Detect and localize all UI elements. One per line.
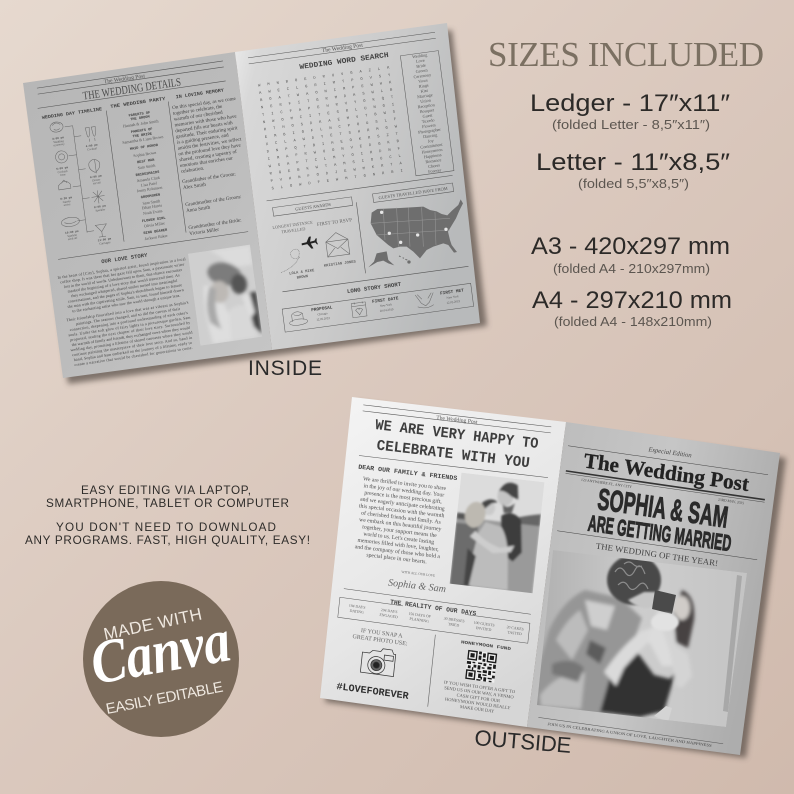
text block: love story: marked the beginning of a love story that would transcend time. As [67, 272, 180, 294]
word list box: Romance [425, 157, 442, 164]
column: in loving memory: celebration. [180, 166, 205, 175]
column: wedding day timeline: Dinner [92, 177, 101, 182]
masthead label: The Wedding Post [436, 415, 478, 426]
text block: love story: the man with the captivating smile. Sam, in turn, found himself drawn [67, 287, 184, 310]
text block: invitation: and we eagerly anticipate celebrating [360, 497, 445, 512]
word list box: Wedding [412, 52, 428, 59]
text block: love story: continue painting the masterpiece of their love story. And so, hand in [72, 335, 193, 358]
panel: long story short timeline: Chicago [317, 311, 328, 316]
column: the wedding party: MAID OF HONOR [130, 144, 159, 152]
icon: heart trail [278, 249, 302, 273]
panel: long story short timeline: PROPOSAL [311, 304, 333, 313]
text block: sizes list: (folded Letter - 8,5″x11″) [552, 118, 710, 132]
badge: made with canva: MADE WITH [102, 605, 204, 644]
text block: sizes list: (folded A4 - 148x210mm) [554, 315, 712, 329]
column: in loving memory: Grandmother of the Groom: [185, 193, 242, 208]
map: USA guests [368, 199, 463, 267]
word list box [400, 51, 454, 176]
column: in loving memory: IN LOVING MEMORY [175, 87, 224, 100]
column: wedding day timeline: 11:00 pm [98, 237, 112, 242]
word list box: Happiness [424, 152, 442, 159]
text block: invitation: world to us. Let's create lasting [363, 531, 435, 546]
column: wedding day timeline [42, 106, 120, 251]
word search grid: NERFITGRMDHSWLB [261, 88, 400, 111]
word list box: Ceremony [413, 72, 432, 79]
subheading: THE WEDDING OF THE YEAR! [595, 541, 719, 568]
column: in loving memory: Grandmother of the Bride: [188, 216, 242, 231]
panel: guests awards: BROWN [297, 275, 309, 281]
badge: made with canva: Canva [86, 607, 235, 698]
column: the wedding party: FLOWER GIRL [142, 217, 166, 224]
column: in loving memory: is a guiding presence, and [177, 132, 229, 146]
heading: sizes included: SIZES INCLUDED [488, 35, 764, 74]
column: wedding day timeline: arrive [63, 202, 71, 207]
column: wedding day timeline: 6:00 pm [90, 175, 102, 179]
column: the wedding party: Noah Evans [143, 208, 163, 216]
word list box: Union [420, 97, 432, 104]
text block: sizes list: A3 - 420x297 mm [531, 233, 730, 260]
text block: sizes list [530, 90, 732, 329]
column: in loving memory: warmth of our cherished [173, 109, 224, 123]
column: the wedding party: Lisa Patel [141, 180, 158, 188]
text block: love story: conversations, and the pages of Sophia's sketchbook began to feature [68, 282, 183, 305]
text block: invitation: this special occasion with the warmth [359, 503, 445, 519]
word list box: Photographer [418, 127, 442, 135]
text block: easy editing: EASY EDITING VIA LAPTOP, [81, 484, 251, 497]
word list box: Kiss [420, 88, 429, 94]
text block: sizes list: Letter - 11″x8,5″ [536, 149, 731, 176]
column: in loving memory: together to celebrate, the [173, 104, 223, 117]
address and date [581, 478, 744, 506]
panel: guests awards: LOLA & MIKE [289, 269, 315, 277]
column: wedding day timeline: 5:00 pm [56, 166, 68, 171]
panel: word search page [235, 23, 480, 350]
text block: sizes list: (folded 5,5″x8,5″) [578, 177, 689, 191]
column: the wedding party: Samantha & Liam Brown [122, 134, 164, 145]
column: in loving memory: emotions that enriches our [180, 155, 234, 169]
word search grid: WMNBOEDRUVGAZLK [258, 66, 397, 88]
stats box: 204 DAYS [381, 608, 398, 614]
icon: camera [360, 646, 396, 677]
text block: love story: to the enchanting artist who saw the world through a unique lens. [72, 293, 181, 313]
photo: couple with phone [533, 550, 747, 727]
text block: easy editing: YOU DON'T NEED TO DOWNLOAD [56, 521, 276, 534]
heading: reality of our days: THE REALITY OF OUR DAYS [390, 599, 477, 617]
address and date: 23RD MAY, 2025 [718, 498, 744, 506]
masthead label: The Wedding Post [322, 43, 364, 54]
word list box: Bride [416, 63, 426, 69]
stats box: 194 DAYS [349, 604, 366, 610]
panel: long story short timeline: FIRST MET [440, 287, 465, 297]
stats box: ENGAGED [379, 613, 398, 619]
panel: guests travelled map heading: GUESTS TRAVELLED HAVE FROM [378, 186, 448, 200]
column: the wedding party: Amanda Clark [136, 175, 161, 183]
panel: front page [527, 422, 780, 755]
text block: invitation: presence is the most precious gift, [364, 489, 443, 505]
column: in loving memory [170, 86, 254, 237]
text block: love story: hand, Sophia and Sam embarked on the journey of a lifetime, ready to [73, 340, 192, 363]
word list box: Guest [422, 112, 434, 119]
word search grid: IMAFRWUONVEDGKB [268, 139, 406, 162]
word list box: Tuxedo [422, 117, 435, 124]
column: wedding day timeline: Cocktail [57, 169, 68, 174]
stats box: PLANNING [409, 617, 429, 624]
column: the wedding party: Olivia Miller [144, 220, 166, 228]
text block: photo prompt [352, 627, 409, 648]
column: in loving memory: Alex Smith [183, 182, 207, 191]
heading: we are very happy: CELEBRATE WITH YOU [376, 437, 531, 472]
panel: long story short timeline: FIRST DATE [372, 295, 399, 305]
text block: invitation: special place in our hearts. [366, 552, 428, 566]
panel: honeymoon fund: CASH GIFT FOR OUR [456, 692, 500, 703]
column: the wedding party: Sophia Brown [133, 150, 157, 158]
panel: honeymoon fund: HONEYMOON WOULD REALLY [445, 696, 512, 710]
text block: love story: paintings. The seasons changed, and so did the canvas of their [76, 306, 181, 327]
panel: honeymoon fund: IF YOU WISH TO OFFER A GIFT TO [444, 680, 516, 694]
heading: dear family: DEAR OUR FAMILY & FRIENDS [358, 464, 458, 482]
stats box: 30 DRESSES [443, 617, 465, 623]
footer line: JOIN US IN CELEBRATING A UNION OF LOVE, LAUGHTER AND HAPPINESS [547, 721, 712, 749]
column: wedding day timeline: 3:00 pm [52, 136, 64, 141]
column: in loving memory: On this special day, as we come [172, 96, 237, 111]
panel: long story short timeline: 12.05.2022 [316, 316, 331, 322]
column: wedding day timeline: 4:00 pm [86, 144, 98, 148]
panel: honeymoon fund: MAKE OUR DAY [460, 704, 495, 714]
text block: easy editing: SMARTPHONE, TABLET OR COMPUTER [46, 497, 289, 510]
word search grid: DNPQTBIHEOKRSZT [267, 132, 405, 155]
column: the wedding party: BRIDESMAIDS [135, 171, 161, 178]
stats box: TRIED [448, 622, 460, 628]
panel: guests awards [270, 197, 361, 283]
column: wedding day timeline: 8:00 pm [94, 205, 106, 209]
signature: WITH ALL OUR LOVE [401, 570, 435, 578]
word search grid: RTHOSDKAEMVTBWS [264, 110, 402, 133]
edition label: Especial Edition [647, 446, 692, 459]
column: wedding day timeline: served [93, 180, 101, 185]
signature: Sophia & Sam [388, 578, 446, 595]
word search grid: EMBIGFLNCPOUSLF [265, 117, 403, 140]
signature [388, 568, 447, 595]
word search grid: XCLAWDYETSHRMGW [266, 124, 404, 147]
text block: photo prompt: IF YOU SNAP A [361, 628, 403, 640]
panel: long story short timeline: 12.03.2019 [446, 299, 461, 305]
panel: honeymoon fund [441, 638, 520, 716]
word list box: Dancing [423, 132, 438, 139]
text block: sizes list: A4 - 297x210 mm [532, 287, 732, 314]
text block: invitation: of cherished friends and family. As [361, 510, 442, 526]
qr code [465, 650, 497, 683]
column: the wedding party: THE GROOM [130, 116, 150, 122]
column: the wedding party: Hannah & John Smith [123, 118, 159, 129]
column: the wedding party: Sam Smith [137, 163, 156, 170]
panel: guests awards: GUESTS AWARDS [295, 202, 332, 212]
word search grid: PVHNFODJEWMKRTA [270, 161, 409, 184]
word list box: Marriage [417, 92, 433, 99]
badge: made with canva: EASILY EDITABLE [105, 679, 225, 718]
panel: long story short timeline: 20.04.2019 [380, 307, 394, 313]
label: outside: OUTSIDE [474, 725, 572, 758]
column: the wedding party: BEST MAN [137, 159, 155, 165]
column: wedding day timeline: Sparkler [67, 233, 77, 238]
column: in loving memory: shared, creating a tapestry of [179, 148, 237, 163]
column: the wedding party: Jackson Baker [144, 233, 169, 241]
column: the wedding party: RING BEARER [143, 229, 168, 236]
text block: love story [57, 256, 199, 368]
column: the wedding party: THE BRIDE [132, 132, 153, 139]
column: in loving memory: memories with those who have [174, 113, 238, 129]
column: wedding day timeline: send off [68, 236, 78, 241]
panel: long story short timeline: New York [380, 302, 393, 308]
text block: invitation: We are thrilled to invite you to share [363, 476, 447, 492]
panel: guests awards: LONGEST DISTANCE [272, 219, 313, 230]
text block: invitation: and the company of those who hold a [354, 543, 441, 560]
panel: welcome page [320, 397, 566, 727]
column: in loving memory: on the profound love they have [178, 141, 242, 158]
column: the wedding party: GROOMSMEN [141, 194, 161, 200]
text block: photo prompt: GREAT PHOTO USE: [352, 634, 408, 648]
column: the wedding party: THE WEDDING PARTY [110, 96, 166, 110]
word search grid: RGEBKWTAMSIOUCL [270, 154, 408, 177]
column: in loving memory: amidst the festivities, we reflect [177, 135, 242, 152]
column: wedding day timeline: 6:30 pm [60, 196, 73, 201]
masthead label: The Wedding Post [104, 73, 146, 85]
panel: long story short timeline [282, 283, 474, 332]
column: in loving memory: Victoria Miller [189, 227, 220, 237]
hashtag: #LOVEFOREVER [336, 682, 410, 703]
panel: honeymoon fund: HONEYMOON FUND [461, 639, 512, 652]
column: in loving memory: Anna Smith [186, 205, 211, 214]
text block: sizes list: Ledger - 17″x11″ [530, 90, 731, 117]
panel: long story short timeline: New York [446, 294, 459, 300]
footer line [537, 717, 723, 750]
text block: love story: coffee shop. It was there that her gaze fell upon Sam, a passionate writer [60, 261, 185, 286]
icon: envelope [325, 231, 350, 257]
word search grid: NWOMCITESRLUNGI [263, 102, 401, 125]
heading: the wedding details: THE WEDDING DETAILS [82, 75, 182, 103]
text block: easy editing [25, 484, 310, 547]
stats box: INVITED [476, 626, 492, 632]
text block: invitation: in the joy of our wedding day. Your [363, 482, 445, 499]
label: inside: INSIDE [248, 357, 322, 380]
address and date: 123 ANYWHERE ST., ANY CITY [581, 478, 633, 490]
word search grid: WSHPTCLMYOIRDNF [269, 146, 407, 169]
headline [587, 482, 736, 556]
word list box: Groom [415, 67, 429, 74]
word list box: Love [416, 58, 425, 64]
text block: love story: create a narrative that would be cherished for generations to come. [74, 345, 193, 367]
panel: wedding details page [23, 52, 272, 378]
word search grid [258, 66, 410, 191]
panel: guests awards: TRAVELLED [281, 226, 306, 234]
text block: love story: proposed, sealing the next chapter of their love story. Surrounded by [70, 320, 191, 343]
word list box: Commitment [420, 142, 444, 150]
column: wedding day timeline: Carriages [99, 240, 111, 246]
stats box: 100 GUESTS [473, 621, 495, 628]
text block: love story: connection, deepening into a profound understanding of each other's [69, 310, 189, 333]
photo: couple embrace [188, 245, 262, 346]
text block: love story: lost in the world of words. Unbeknownst to them, this chance encounter [64, 267, 183, 290]
column: in loving memory: gratitude. Their enduring spirit [176, 125, 239, 140]
word search grid: SLOWDFEWMTGNRBI [271, 169, 410, 191]
stats box: TASTED [507, 630, 522, 636]
heading: wedding word search: WEDDING WORD SEARCH [299, 52, 389, 72]
column: wedding day timeline: ceremony [53, 142, 65, 147]
word list box: Flowers [422, 122, 436, 129]
text block: invitation: we embark on this beautiful journey [359, 516, 442, 533]
column: wedding day timeline: 10:00 pm [65, 230, 79, 235]
photo: couple in field [449, 473, 544, 595]
word list box: Vows [418, 78, 428, 84]
column: wedding day timeline: Sparkler [95, 207, 106, 213]
heading: we are very happy [372, 416, 539, 473]
word list box: Bouquet [419, 107, 435, 114]
column: wedding day timeline: WEDDING DAY TIMELINE [42, 106, 103, 121]
panel: honeymoon fund: SEND US ON OUR WAY, A VENMO [444, 685, 515, 701]
column: wedding day timeline: Wedding [53, 139, 64, 144]
panel: guests awards: KRISTIAN JONES [324, 260, 357, 269]
word search grid: TICFAPEHRVYOKQT [262, 95, 401, 118]
text block: love story: wedding day, promising a lifetime of shared canvases where they would [70, 330, 193, 353]
badge: made with canva [83, 581, 239, 737]
column: the wedding party: PARENTS OF [131, 128, 153, 135]
text block: love story: the warmth of family and friends, they exchanged vows where they would [71, 325, 190, 348]
column: the wedding party [110, 96, 184, 243]
column: the wedding party: Ethan Harris [141, 202, 163, 210]
stats box: 20 CAKES [506, 625, 524, 632]
column: wedding day timeline: Guests [62, 199, 72, 204]
word list box: Honeymoon [421, 147, 444, 155]
text block: invitation [354, 476, 448, 567]
panel: guests travelled map heading [373, 183, 454, 202]
column: the wedding party: Sam Smith [142, 198, 160, 206]
word list box: Forever [428, 167, 442, 174]
word search grid: BOATWAONIMPEWHK [260, 80, 399, 103]
text block: love story: they exchanged whispered, shared smiles turned into meaningful [71, 278, 179, 299]
word list box: Joy [428, 138, 435, 144]
stats box: DATING [349, 609, 364, 615]
masthead rules [566, 471, 765, 502]
word search grid: AWECLGRIMTPOVSY [259, 73, 398, 96]
word list box: Cheers [428, 162, 440, 169]
text block: sizes list: (folded A4 - 210x297mm) [553, 262, 710, 276]
column: in loving memory: Grandfather of the Groom: [182, 170, 236, 185]
column: in loving memory: departed fills our hearts with [175, 119, 234, 134]
text block: invitation: memories filled with love, laughter, [357, 537, 440, 553]
column: wedding day timeline: hour [60, 172, 66, 177]
panel: guests awards: FIRST TO RSVP [317, 217, 353, 228]
text block: love story: souls. Under the soft glow of fairy lights in a picturesque garden, Sam [68, 315, 191, 338]
column: the wedding party: PARENTS OF [128, 111, 151, 118]
heading: long story short: LONG STORY SHORT [347, 281, 402, 295]
text block: invitation: together, your support means the [362, 524, 437, 539]
icon: plane [301, 236, 318, 250]
column: the wedding party: Jenny Robinson [136, 185, 163, 193]
stats box [338, 597, 530, 643]
word list box: Reception [417, 102, 436, 109]
heading: we are very happy: WE ARE VERY HAPPY TO [374, 416, 539, 453]
text block: love story: In the heart of [City], Sophia, a spirited artist, found inspiration in a local [57, 256, 187, 281]
brochure: outside [320, 397, 780, 755]
text block: easy editing: ANY PROGRAMS. FAST, HIGH QUALITY, EASY! [25, 534, 310, 547]
rule above stats [344, 589, 531, 614]
text block: love story: Their friendship flourished into a love that was as vibrant as Sophia's [66, 300, 189, 322]
word list box: Rings [418, 83, 429, 89]
stats box: 156 DAYS OF [408, 612, 431, 619]
heading: our love story: OUR LOVE STORY [101, 251, 148, 265]
masthead: the wedding post: The Wedding Post [582, 448, 751, 496]
column: wedding day timeline: Cocktail [87, 146, 97, 152]
